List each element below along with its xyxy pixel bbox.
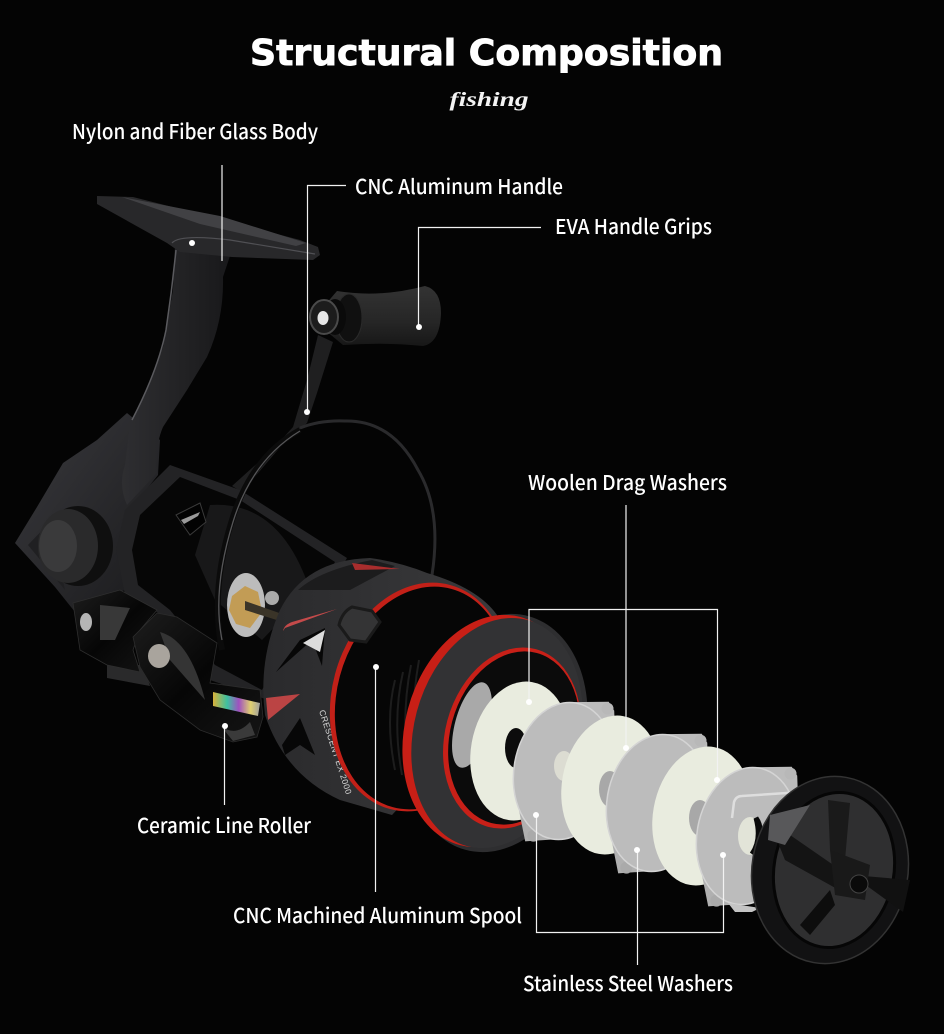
- gearbox body: [15, 413, 160, 612]
- wool washer 1: [460, 674, 580, 828]
- bail arm with screws: [73, 590, 263, 742]
- label: Ceramic Line Roller: [137, 723, 312, 839]
- label: Stainless Steel Washers: [523, 812, 733, 997]
- label: Nylon and Fiber Glass Body: Nylon and Fiber Glass Body: [72, 115, 318, 145]
- spool skirt: [263, 558, 497, 815]
- label: CNC Machined Aluminum Spool: [233, 664, 522, 929]
- spool latch: [339, 607, 380, 642]
- wool washer 2: [551, 708, 671, 862]
- bail wire highlight: [219, 431, 300, 640]
- wool washer 3: [642, 739, 762, 893]
- exploded fishing reel: [15, 196, 923, 976]
- spool cylinder with red ring: [305, 562, 535, 832]
- steel washer 1: [502, 687, 626, 855]
- label: Ceramic Line Roller: Ceramic Line Roller: [137, 809, 312, 839]
- spool skirt lettering: CRESCENT EX 2000: [317, 709, 354, 796]
- label: Stainless Steel Washers: Stainless Steel Washers: [523, 967, 733, 997]
- title: Structural Composition: [250, 33, 723, 74]
- spool drag cap: [737, 764, 923, 976]
- label: Woolen Drag Washers: Woolen Drag Washers: [528, 466, 727, 496]
- brass nut and shaft: [227, 573, 285, 637]
- reel foot and stem: [97, 196, 320, 505]
- steel washer 2: [595, 719, 719, 887]
- drag knob: [38, 506, 113, 586]
- label: CNC Machined Aluminum Spool: CNC Machined Aluminum Spool: [233, 899, 522, 929]
- label: EVA Handle Grips: EVA Handle Grips: [555, 210, 712, 240]
- ceramic line roller: [213, 692, 260, 716]
- label: Nylon and Fiber Glass Body: [72, 115, 318, 261]
- rotor cup: [116, 465, 347, 700]
- steel washer 3 with clicker wire: [685, 752, 809, 920]
- bail wire: [300, 421, 435, 575]
- bail wire front arm: [218, 430, 300, 650]
- reel handle arm: [232, 335, 333, 492]
- label: CNC Aluminum Handle: [304, 170, 563, 415]
- EVA handle grip: [310, 286, 441, 346]
- label: Woolen Drag Washers: [526, 466, 727, 783]
- brand script: fishing: [450, 89, 528, 111]
- label: EVA Handle Grips: [416, 210, 712, 330]
- label: CNC Aluminum Handle: CNC Aluminum Handle: [355, 170, 563, 200]
- spool front flange: [377, 593, 613, 873]
